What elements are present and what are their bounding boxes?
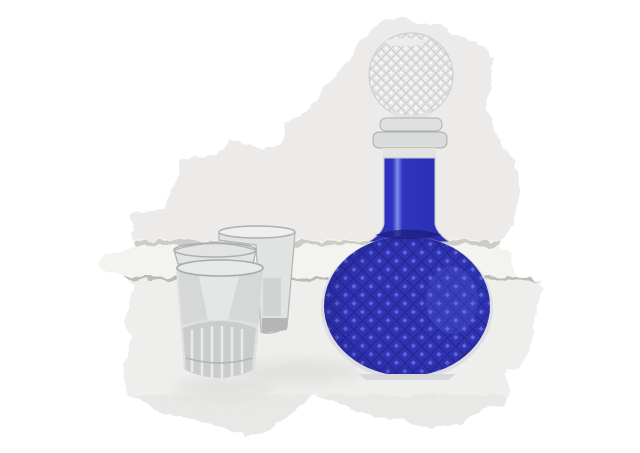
neck with blue liquid [368,158,450,242]
icon: back shot glass [219,226,295,333]
collar [373,118,447,160]
stopper ball [369,33,453,122]
round body with blue liquid [321,230,493,380]
icon: decanter [321,33,493,380]
icon: middle shot glass [174,243,256,264]
icon: front shot glass [176,260,263,378]
illustration: decanter and shot glasses on a map-shaped photo [98,17,544,437]
background: map-shaped wall and table photo [90,10,550,440]
